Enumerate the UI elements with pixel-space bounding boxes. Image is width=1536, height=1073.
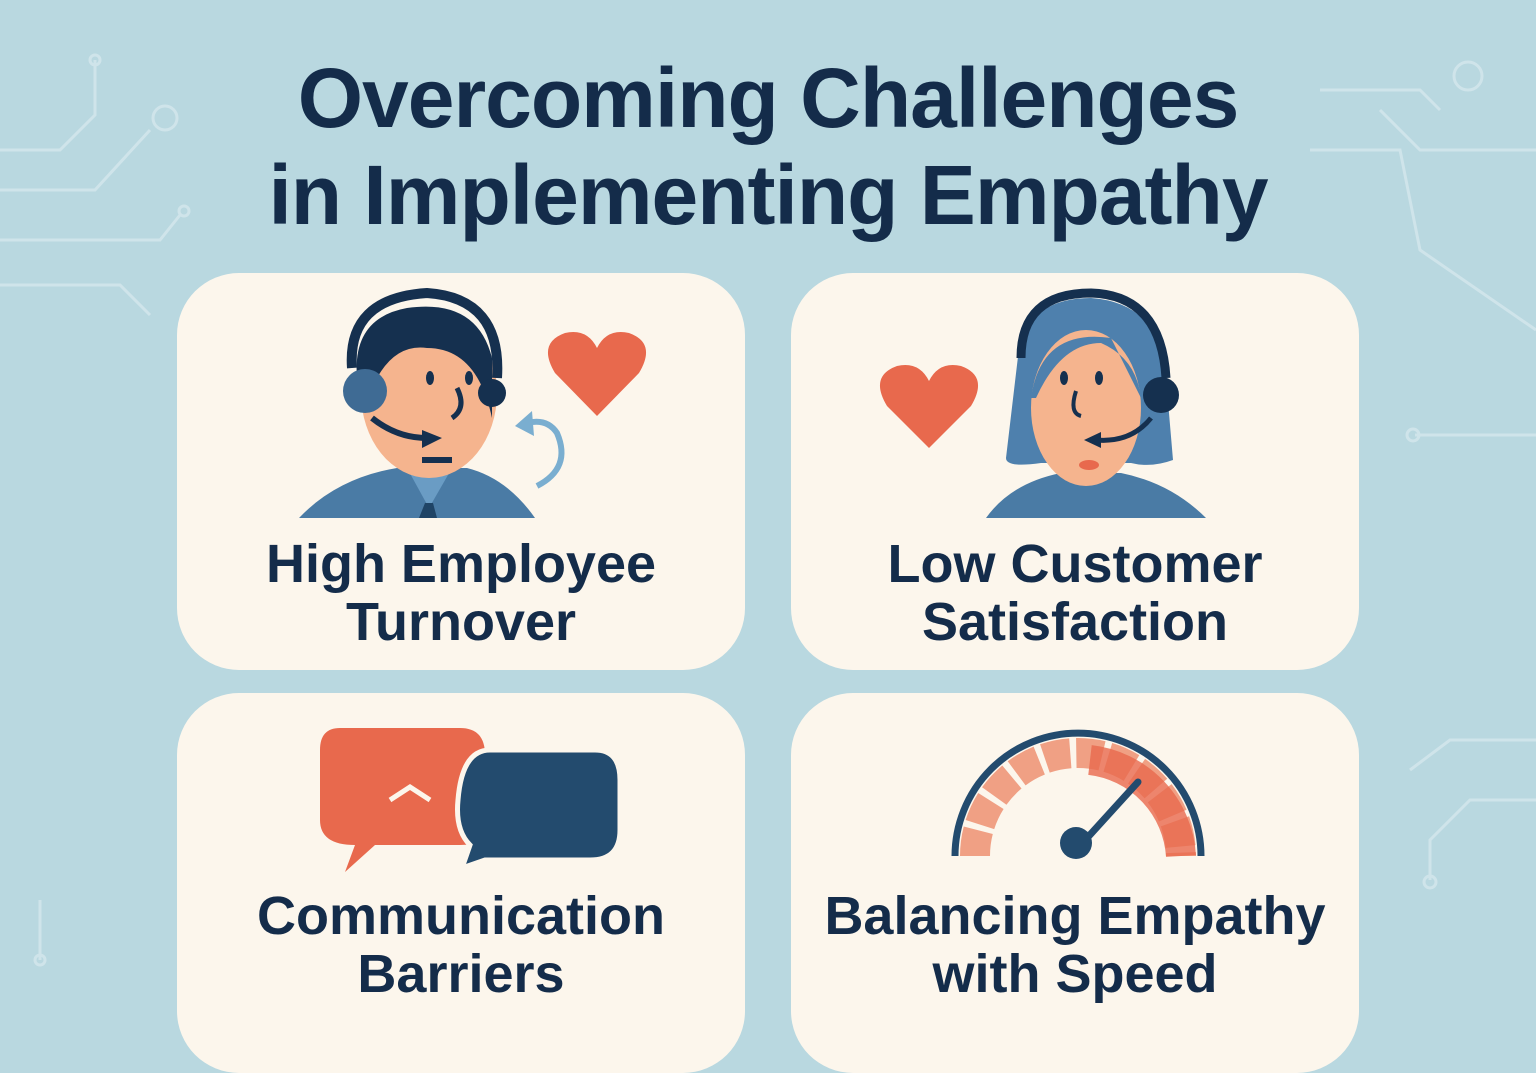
label: Low Customer [887,534,1263,594]
panel: communication barriers [177,693,745,1073]
label: with Speed [932,944,1218,1004]
title: in Implementing Empathy [268,148,1268,242]
label: Satisfaction [922,592,1228,652]
panel: low customer satisfaction [791,273,1359,670]
label: Balancing Empathy [824,886,1326,946]
label: High Employee [266,534,656,594]
icon: speech bubbles [320,728,618,872]
label [266,534,656,652]
label [887,534,1263,652]
label: Turnover [346,592,576,652]
label: Communication [257,886,665,946]
icon: female agent with heart [880,288,1206,518]
panel: high employee turnover [177,273,745,670]
title: Overcoming Challenges [298,51,1238,145]
label [824,886,1326,1004]
icon: male agent with headset [299,288,646,518]
label [257,886,665,1004]
title [268,51,1268,242]
panel: balancing empathy with speed [791,693,1359,1073]
icon: speedometer gauge [952,730,1204,859]
label: Barriers [357,944,565,1004]
